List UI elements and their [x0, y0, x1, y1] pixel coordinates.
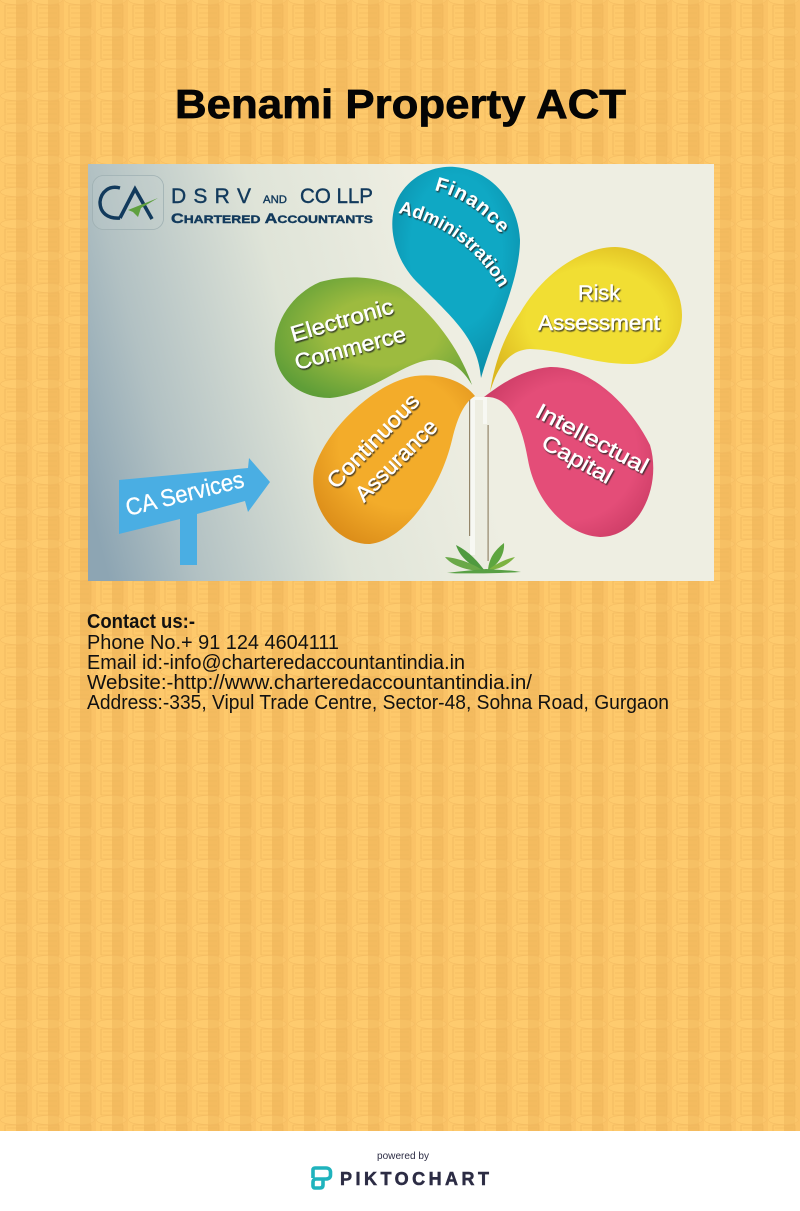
arrow: CA Services sign: CA Services: [123, 466, 247, 522]
logo: company name: AND: [263, 194, 287, 206]
petal: electronic commerce: Commerce: [292, 321, 408, 375]
petal: finance administration: [392, 166, 520, 378]
petal: intellectual capital: Intellectual: [532, 398, 653, 479]
logo: CA mark: [92, 176, 164, 230]
wordmark: PIKTOCHART: [340, 1169, 489, 1189]
logo: company name: CHARTERED A CCOUNTANTS: [171, 210, 373, 226]
contact block: Email id:-info@charteredaccountantindia.in: [87, 652, 465, 674]
powered by text: powered by: [377, 1150, 430, 1162]
petal: intellectual capital: [484, 367, 653, 537]
stem: [469, 397, 489, 561]
petal: electronic commerce: Electronic: [287, 294, 396, 347]
logo: company name: D S R V: [171, 185, 251, 208]
panel: CA services image: [88, 164, 714, 581]
petal: intellectual capital: Capital: [538, 430, 617, 489]
icon: Piktochart logo: [313, 1168, 330, 1188]
petal: continuous assurance: [313, 375, 475, 544]
title: Benami Property ACT: [175, 81, 626, 127]
logo: company name: [171, 185, 373, 226]
petal: risk assessment: Assessment: [538, 312, 660, 335]
logo: company name: CO LLP: [300, 185, 373, 208]
petal: finance administration: Finance: [435, 177, 508, 234]
petal: continuous assurance: Continuous: [322, 388, 424, 493]
contact block: Website:-http://www.charteredaccountantindia.in/: [87, 672, 532, 694]
petal: risk assessment: [490, 247, 682, 392]
contact block: [87, 611, 669, 714]
petal: continuous assurance: Assurance: [350, 414, 442, 507]
contact block: Phone No.+ 91 124 4604111: [87, 632, 339, 654]
footer: [0, 1131, 800, 1211]
icon: grass: [445, 543, 521, 573]
arrow: CA Services sign: [119, 458, 270, 565]
contact block: Address:-335, Vipul Trade Centre, Sector-48, Sohna Road, Gurgaon: [87, 692, 669, 714]
petal: electronic commerce: [275, 277, 472, 398]
contact block: Contact us:-: [87, 611, 195, 633]
petal: finance administration: Administration: [398, 202, 508, 290]
petal: risk assessment: Risk: [578, 282, 621, 305]
